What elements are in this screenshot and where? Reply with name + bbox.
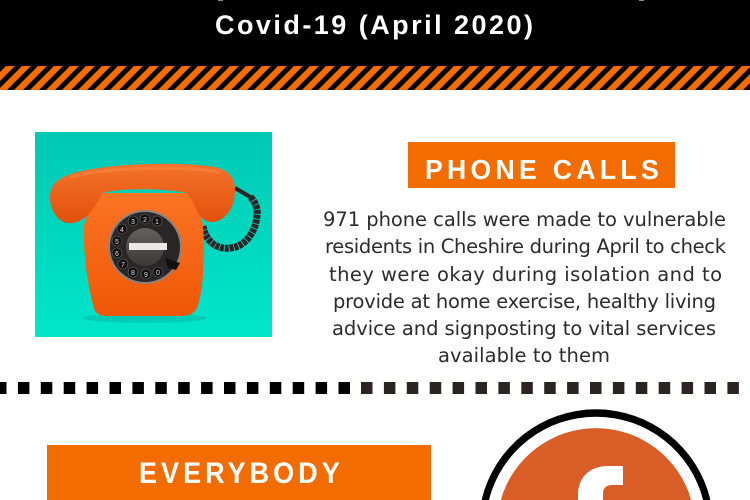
- dial: 6: [115, 251, 119, 258]
- dial: 5: [115, 239, 119, 246]
- dial: [108, 210, 182, 284]
- photo: orange rotary telephone: [35, 132, 272, 337]
- text block: phone calls description: available to them: [438, 344, 610, 367]
- icon: facebook badge: [482, 409, 710, 500]
- text block: phone calls description: provide at home exercise, healthy living: [333, 290, 716, 313]
- panel: everybody: [47, 409, 710, 500]
- dial: 7: [121, 262, 125, 269]
- label: phone calls: PHONE CALLS: [425, 153, 659, 185]
- header band: [0, 0, 750, 66]
- label: everybody: EVERYBODY: [139, 457, 340, 490]
- dial: 9: [144, 272, 148, 279]
- dial: 0: [156, 270, 160, 277]
- label: everybody: [47, 445, 431, 500]
- dial: 1: [155, 219, 159, 226]
- dial: 2: [143, 217, 147, 224]
- text block: phone calls description: [323, 208, 727, 367]
- text block: phone calls description: advice and signposting to vital services: [332, 317, 716, 340]
- hazard stripe band: [0, 66, 750, 90]
- label: phone calls: [408, 142, 675, 188]
- title: Covid-19 (April 2020): [215, 10, 533, 40]
- text block: phone calls description: 971 phone calls were made to vulnerable: [323, 208, 726, 231]
- panel: phone calls: [35, 132, 727, 367]
- dial: 4: [120, 227, 124, 234]
- text block: phone calls description: residents in Cheshire during April to check: [325, 235, 727, 258]
- text block: phone calls description: they were okay during isolation and to: [329, 263, 722, 286]
- dial: 3: [131, 219, 135, 226]
- dashed divider: [0, 382, 750, 394]
- dial: 8: [131, 270, 135, 277]
